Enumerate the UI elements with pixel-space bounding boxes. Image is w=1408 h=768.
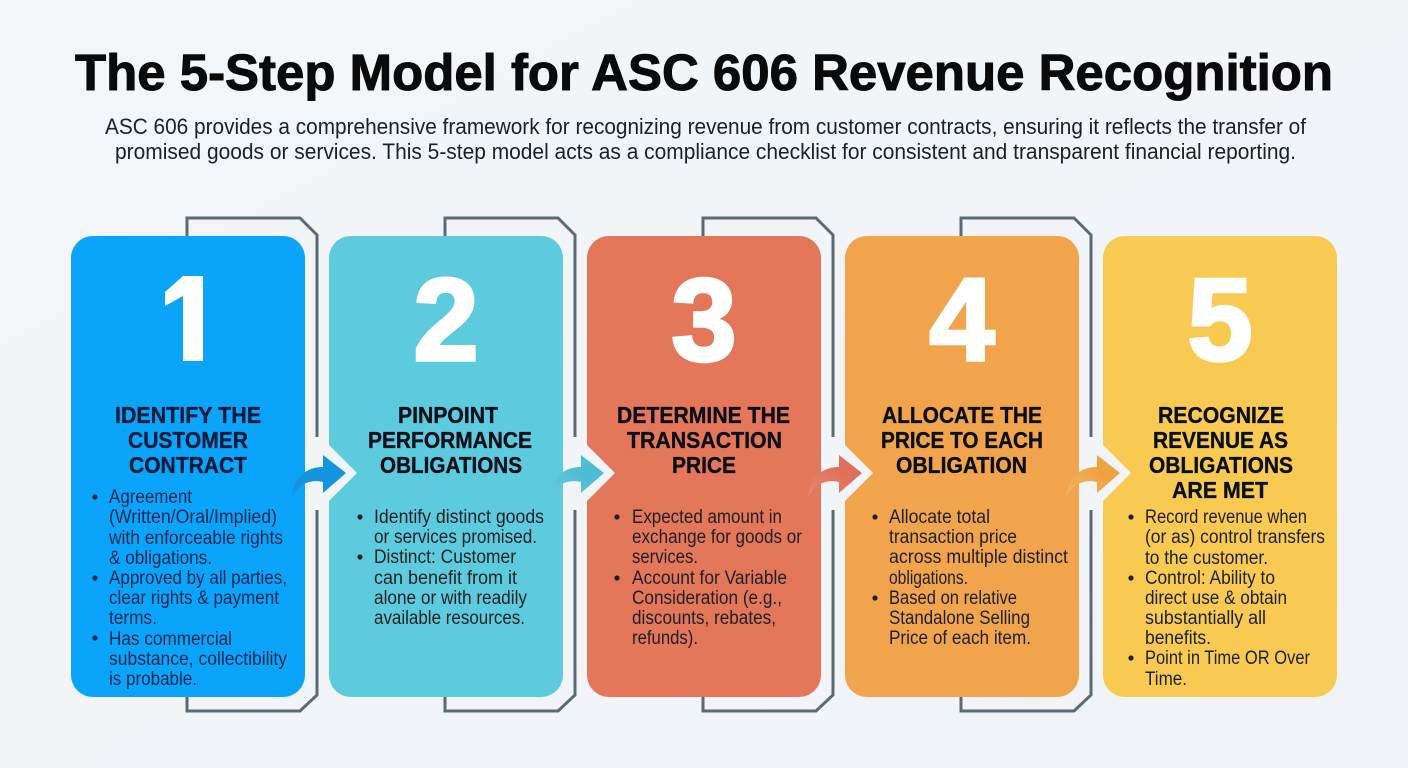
heading: step 5: OBLIGATIONS (1149, 452, 1293, 478)
bullets: step 4: transaction price (889, 527, 1017, 548)
bullets: step 5 (1128, 507, 1325, 690)
bullets: step 3: refunds). (632, 628, 698, 649)
heading: step 1: CONTRACT (129, 452, 247, 478)
heading: step 2: PERFORMANCE (368, 427, 532, 453)
heading: step 3: PRICE (672, 452, 736, 478)
arrow: step 3 to 4 (808, 455, 862, 498)
bullets: step 1: terms. (109, 608, 157, 629)
heading: step 3 (617, 402, 790, 478)
bullets: step 5: (or as) control transfers (1145, 527, 1325, 548)
step number 4: 4 (929, 254, 995, 385)
heading: step 4: PRICE TO EACH (881, 427, 1043, 453)
bullets: step 5: Record revenue when (1145, 507, 1307, 528)
bullets: step 3 (614, 507, 803, 649)
bullets: step 5: benefits. (1145, 628, 1211, 649)
bullets: step 2 (357, 507, 544, 629)
panel: step 3 (587, 236, 821, 697)
bullets: step 1: & obligations. (109, 548, 212, 569)
bracket: step 2 (445, 218, 575, 711)
panel: step 5 (1103, 236, 1337, 697)
bullets: step 5: substantially all (1145, 608, 1266, 629)
heading: step 5: RECOGNIZE (1158, 402, 1284, 428)
bullets: step 2: available resources. (374, 608, 525, 629)
bullets: step 4: across multiple distinct (889, 547, 1069, 568)
arrow: step 4 to 5 (1066, 455, 1120, 498)
heading: step 4 (881, 402, 1043, 478)
step number 1 (165, 276, 203, 361)
step number 1: 1 (158, 255, 224, 386)
heading: step 1: CUSTOMER (128, 427, 248, 453)
heading: step 5 (1149, 402, 1293, 503)
bullets: step 3: discounts, rebates, (632, 608, 776, 629)
heading: step 1: IDENTIFY THE (115, 402, 261, 428)
bullets: step 2: alone or with readily (374, 588, 527, 609)
bullets: step 3: services. (632, 547, 698, 568)
bullets: step 1: clear rights & payment (109, 588, 280, 609)
step number 5: 5 (1187, 254, 1253, 385)
bullets: step 5: Time. (1145, 669, 1187, 690)
heading: step 5: REVENUE AS (1153, 427, 1288, 453)
arrow: step 2 to 3 (550, 455, 604, 498)
bullets: step 1: is probable. (109, 669, 197, 690)
heading: step 2 (368, 402, 532, 478)
bracket: step 4 (961, 218, 1091, 711)
bullets: step 5: to the customer. (1145, 548, 1268, 569)
subtitle (105, 114, 1307, 164)
bracket: step 1 (187, 218, 317, 711)
bullets: step 2: Identify distinct goods (374, 507, 544, 528)
bullets: step 4 (872, 507, 1069, 649)
bullets: step 2: can benefit from it (374, 568, 518, 589)
bullets: step 4: Based on relative (889, 588, 1017, 609)
panel: step 4 (845, 236, 1079, 697)
bullets: step 1: Approved by all parties, (109, 568, 287, 589)
bullets: step 4: Price of each item. (889, 628, 1031, 649)
bullets: step 2: or services promised. (374, 527, 537, 548)
heading: step 4: OBLIGATION (896, 452, 1027, 478)
title: The 5-Step Model for ASC 606 Revenue Recognition (75, 44, 1333, 101)
bullets: step 4: Standalone Selling (889, 608, 1030, 629)
step number 2: 2 (413, 254, 479, 385)
bullets: step 1: Has commercial (109, 629, 232, 650)
bullets: step 5: direct use & obtain (1145, 588, 1287, 609)
bullets: step 4: obligations. (889, 568, 968, 589)
arrow: step 1 to 2 (292, 455, 346, 498)
bullets: step 3: exchange for goods or (632, 527, 803, 548)
bullets: step 1: with enforceable rights (108, 528, 283, 549)
bullets: step 3: Consideration (e.g., (632, 588, 782, 609)
subtitle: ASC 606 provides a comprehensive framework for recognizing revenue from customer contracts, ensuring it reflects the transfer of (105, 114, 1307, 139)
heading: step 3: TRANSACTION (627, 427, 782, 453)
bullets: step 3: Account for Variable (632, 568, 787, 589)
bullets: step 1: substance, collectibility (109, 649, 287, 670)
bullets: step 1: (Written/Oral/Implied) (109, 507, 277, 528)
bullets: step 4: Allocate total (889, 507, 990, 528)
heading: step 1 (115, 402, 261, 478)
panel: step 2 (329, 236, 563, 697)
heading: step 2: PINPOINT (398, 402, 498, 428)
bullets: step 5: Control: Ability to (1145, 568, 1275, 589)
subtitle: promised goods or services. This 5-step model acts as a compliance checklist for consistent and transparent financial reporting. (115, 139, 1296, 164)
step number 3: 3 (671, 254, 737, 385)
bracket: step 3 (703, 218, 833, 711)
bullets: step 2: Distinct: Customer (374, 547, 517, 568)
heading: step 4: ALLOCATE THE (882, 402, 1042, 428)
heading: step 2: OBLIGATIONS (380, 452, 522, 478)
panel: step 1 (71, 236, 305, 697)
bullets: step 1: Agreement (109, 487, 193, 508)
bullets: step 3: Expected amount in (632, 507, 782, 528)
heading: step 3: DETERMINE THE (617, 402, 790, 428)
bullets: step 1 (92, 487, 287, 690)
bullets: step 5: Point in Time OR Over (1145, 648, 1311, 669)
heading: step 5: ARE MET (1172, 477, 1268, 503)
